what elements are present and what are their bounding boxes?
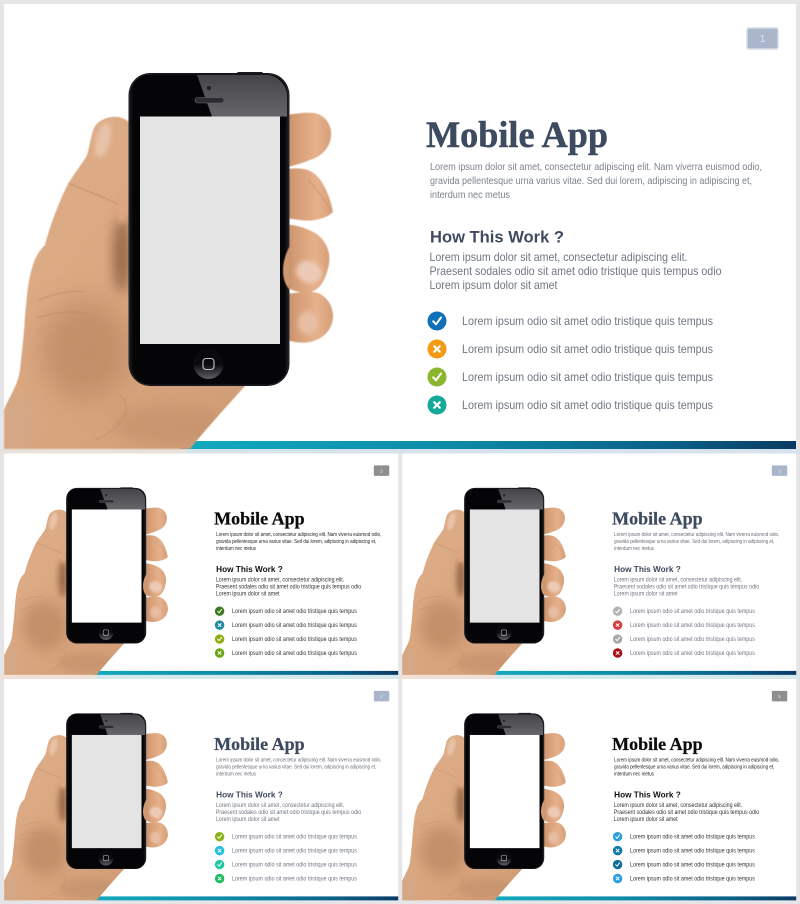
panel: main slide <box>0 4 796 450</box>
list item 4: Lorem ipsum odio sit amet odio tristique quis tempus <box>630 876 755 882</box>
title: Mobile App <box>426 115 608 156</box>
intro paragraph: gravida pellentesque urna varius vitae. Sed dui lorem, adipiscing in adipiscing et, <box>216 765 376 771</box>
hand holding phone <box>0 72 333 450</box>
phone screen <box>470 509 540 623</box>
list item 1 <box>613 832 755 841</box>
panel: slide 3 grey-red variant <box>400 453 796 675</box>
intro paragraph: Lorem ipsum dolor sit amet, consectetur adipiscing elit. Nam viverra euismod odio, <box>216 532 381 538</box>
intro paragraph: Lorem ipsum dolor sit amet, consectetur adipiscing elit. Nam viverra euismod odio, <box>614 758 779 764</box>
footer bar <box>490 896 796 900</box>
body text: Lorem ipsum dolor sit amet, consectetur adipiscing elit. <box>430 250 688 264</box>
list item 2 <box>215 846 357 855</box>
hand holding phone <box>2 713 168 901</box>
list item 2: Lorem ipsum odio sit amet odio tristique quis tempus <box>630 849 755 855</box>
list item 3 <box>613 634 755 644</box>
body text: Praesent sodales odio sit amet odio tristique quis tempus odio <box>614 810 760 816</box>
body text: Lorem ipsum dolor sit amet <box>614 591 678 597</box>
phone screen <box>72 509 142 623</box>
page number badge <box>374 465 389 476</box>
intro paragraph <box>614 758 779 778</box>
hand holding phone <box>2 487 168 675</box>
body text <box>216 803 362 823</box>
body text: Praesent sodales odio sit amet odio tristique quis tempus odio <box>216 810 362 816</box>
list item 1: Lorem ipsum odio sit amet odio tristique quis tempus <box>462 314 713 328</box>
list item 4: Lorem ipsum odio sit amet odio tristique quis tempus <box>232 876 357 882</box>
intro paragraph <box>216 532 381 552</box>
intro paragraph <box>216 758 381 778</box>
body text: Lorem ipsum dolor sit amet <box>430 278 558 292</box>
intro paragraph: interdum nec metus <box>430 189 510 201</box>
body text: Lorem ipsum dolor sit amet <box>216 817 280 823</box>
list item 2 <box>428 340 713 358</box>
list item 1: Lorem ipsum odio sit amet odio tristique quis tempus <box>232 835 357 841</box>
list item 1: Lorem ipsum odio sit amet odio tristique quis tempus <box>232 609 357 615</box>
intro paragraph: interdum nec metus <box>614 772 654 778</box>
intro paragraph <box>614 532 779 552</box>
hand holding phone <box>400 487 566 675</box>
phone screen <box>470 735 540 848</box>
list item 3: Lorem ipsum odio sit amet odio tristique quis tempus <box>630 863 755 869</box>
list item 2: Lorem ipsum odio sit amet odio tristique quis tempus <box>232 623 357 629</box>
page number badge: 5 <box>778 694 781 700</box>
list item 4 <box>215 874 357 883</box>
title: Mobile App <box>612 734 703 754</box>
list item 4: Lorem ipsum odio sit amet odio tristique quis tempus <box>462 398 713 412</box>
list item 2: Lorem ipsum odio sit amet odio tristique quis tempus <box>232 849 357 855</box>
list item 2: Lorem ipsum odio sit amet odio tristique quis tempus <box>630 623 755 629</box>
body text: Lorem ipsum dolor sit amet, consectetur adipiscing elit. <box>614 577 743 583</box>
phone screen <box>72 735 142 848</box>
list item 4: Lorem ipsum odio sit amet odio tristique quis tempus <box>232 651 357 657</box>
list item 1: Lorem ipsum odio sit amet odio tristique quis tempus <box>630 835 755 841</box>
intro paragraph: Lorem ipsum dolor sit amet, consectetur adipiscing elit. Nam viverra euismod odio, <box>216 758 381 764</box>
page number badge: 4 <box>380 694 383 700</box>
list item 4 <box>428 396 713 414</box>
panel: slide 2 black variant <box>2 453 398 675</box>
title: Mobile App <box>612 509 703 529</box>
footer bar <box>92 896 398 900</box>
body text: Lorem ipsum dolor sit amet <box>614 817 678 823</box>
heading: how this work: How This Work ? <box>216 790 283 800</box>
panel: slide 4 green-cyan variant <box>2 679 398 901</box>
list item 3 <box>215 634 357 644</box>
hand holding phone <box>400 713 566 901</box>
list item 3 <box>428 368 713 386</box>
list item 3 <box>215 860 357 869</box>
body text <box>614 803 760 823</box>
page number badge: 3 <box>778 468 781 474</box>
list item 4 <box>215 648 357 658</box>
intro paragraph: Lorem ipsum dolor sit amet, consectetur adipiscing elit. Nam viverra euismod odio, <box>614 532 779 538</box>
body text <box>216 577 362 597</box>
intro paragraph: interdum nec metus <box>216 546 256 552</box>
page number badge <box>772 691 787 701</box>
heading: how this work: How This Work ? <box>614 790 681 800</box>
page number badge: 1 <box>760 34 766 45</box>
list item 1: Lorem ipsum odio sit amet odio tristique quis tempus <box>630 609 755 615</box>
list item 4 <box>613 874 755 883</box>
footer bar <box>180 441 796 449</box>
body text: Lorem ipsum dolor sit amet, consectetur adipiscing elit. <box>614 803 743 809</box>
list item 2 <box>215 620 357 630</box>
intro paragraph: gravida pellentesque urna varius vitae. Sed dui lorem, adipiscing in adipiscing et, <box>430 175 752 187</box>
footer bar <box>92 671 398 675</box>
intro paragraph: interdum nec metus <box>216 772 256 778</box>
intro paragraph: gravida pellentesque urna varius vitae. Sed dui lorem, adipiscing in adipiscing et, <box>614 765 774 771</box>
page number badge <box>374 691 389 701</box>
footer bar <box>490 671 796 675</box>
list item 3: Lorem ipsum odio sit amet odio tristique quis tempus <box>232 863 357 869</box>
title: Mobile App <box>214 734 305 754</box>
page number badge <box>772 465 787 476</box>
list item 3 <box>613 860 755 869</box>
list item 1 <box>215 606 357 616</box>
body text: Lorem ipsum dolor sit amet, consectetur adipiscing elit. <box>216 803 345 809</box>
list item 1 <box>428 312 713 330</box>
list item 1 <box>613 606 755 616</box>
list item 3: Lorem ipsum odio sit amet odio tristique quis tempus <box>232 637 357 643</box>
list item 3: Lorem ipsum odio sit amet odio tristique quis tempus <box>462 370 713 384</box>
body text: Praesent sodales odio sit amet odio tristique quis tempus odio <box>430 264 722 278</box>
body text <box>430 250 722 292</box>
intro paragraph <box>430 161 762 201</box>
panel: slide 5 black-blue variant <box>400 679 796 901</box>
title: Mobile App <box>214 509 305 529</box>
body text: Lorem ipsum dolor sit amet <box>216 591 280 597</box>
body text: Praesent sodales odio sit amet odio tristique quis tempus odio <box>614 584 760 590</box>
list item 4 <box>613 648 755 658</box>
body text <box>614 577 760 597</box>
list item 2 <box>613 846 755 855</box>
list item 2: Lorem ipsum odio sit amet odio tristique quis tempus <box>462 342 713 356</box>
phone screen <box>140 116 280 344</box>
intro paragraph: gravida pellentesque urna varius vitae. Sed dui lorem, adipiscing in adipiscing et, <box>216 539 376 545</box>
intro paragraph: interdum nec metus <box>614 546 654 552</box>
heading: how this work: How This Work ? <box>216 564 283 574</box>
list item 4: Lorem ipsum odio sit amet odio tristique quis tempus <box>630 651 755 657</box>
page number badge <box>747 28 778 49</box>
body text: Praesent sodales odio sit amet odio tristique quis tempus odio <box>216 584 362 590</box>
page number badge: 2 <box>380 468 383 474</box>
list item 2 <box>613 620 755 630</box>
body text: Lorem ipsum dolor sit amet, consectetur adipiscing elit. <box>216 577 345 583</box>
heading: how this work: How This Work ? <box>430 228 564 246</box>
list item 3: Lorem ipsum odio sit amet odio tristique quis tempus <box>630 637 755 643</box>
heading: how this work: How This Work ? <box>614 564 681 574</box>
list item 1 <box>215 832 357 841</box>
intro paragraph: gravida pellentesque urna varius vitae. Sed dui lorem, adipiscing in adipiscing et, <box>614 539 774 545</box>
